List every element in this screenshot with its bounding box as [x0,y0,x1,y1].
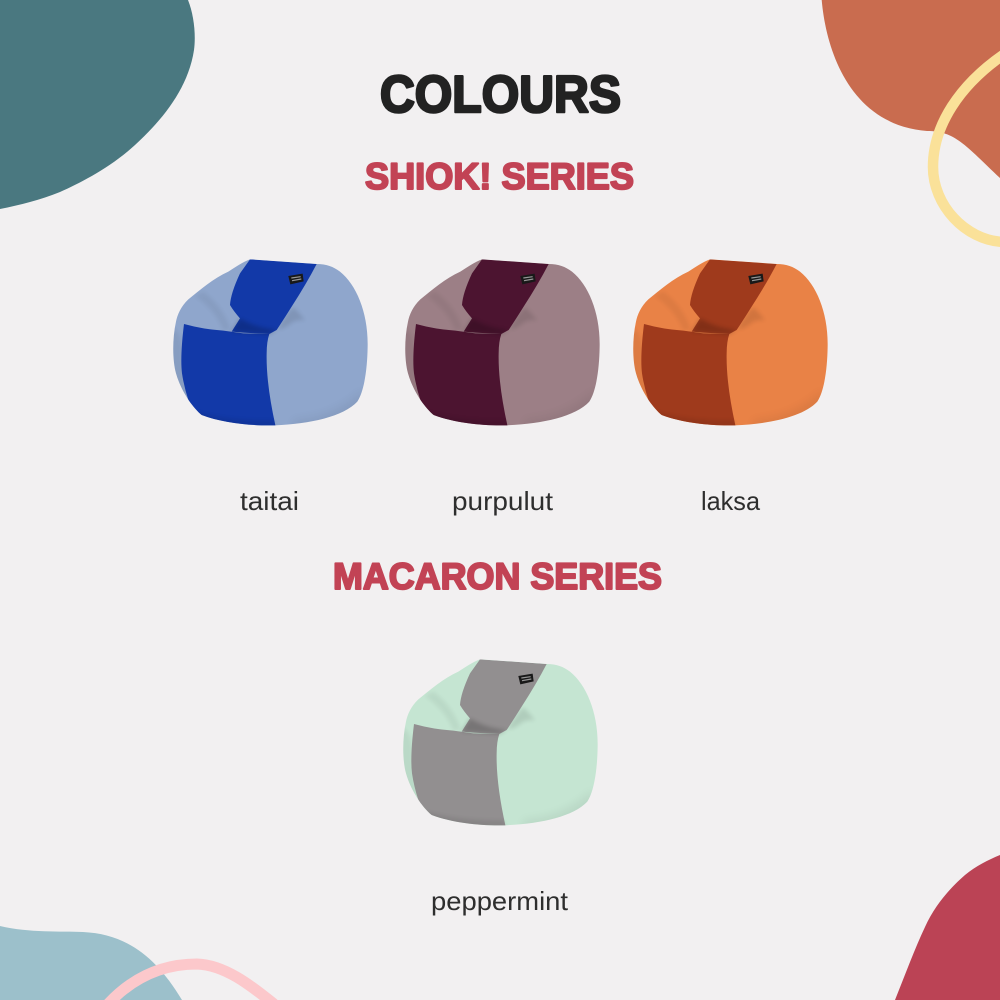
product: laksa bean bag [620,250,840,440]
label: taitai: taitai [240,486,299,516]
title: COLOURS [380,66,621,124]
blob: orange top right [822,0,1000,178]
blob: red bottom right [895,855,1000,1000]
heading: Shiok series: SHIOK! SERIES [365,156,634,197]
label: laksa: laksa [701,486,761,516]
product: purpulut bean bag [392,250,612,440]
product: taitai bean bag [160,250,380,440]
label: peppermint: peppermint [431,886,569,916]
label: purpulut: purpulut [452,486,554,516]
blob: light blue bottom left [0,926,182,1000]
ring: yellow top right [933,55,1000,242]
blob: teal top left [0,0,195,209]
heading: Macaron series: MACARON SERIES [333,556,662,597]
product: peppermint bean bag [390,650,610,840]
ring: pink bottom left [108,964,274,1000]
